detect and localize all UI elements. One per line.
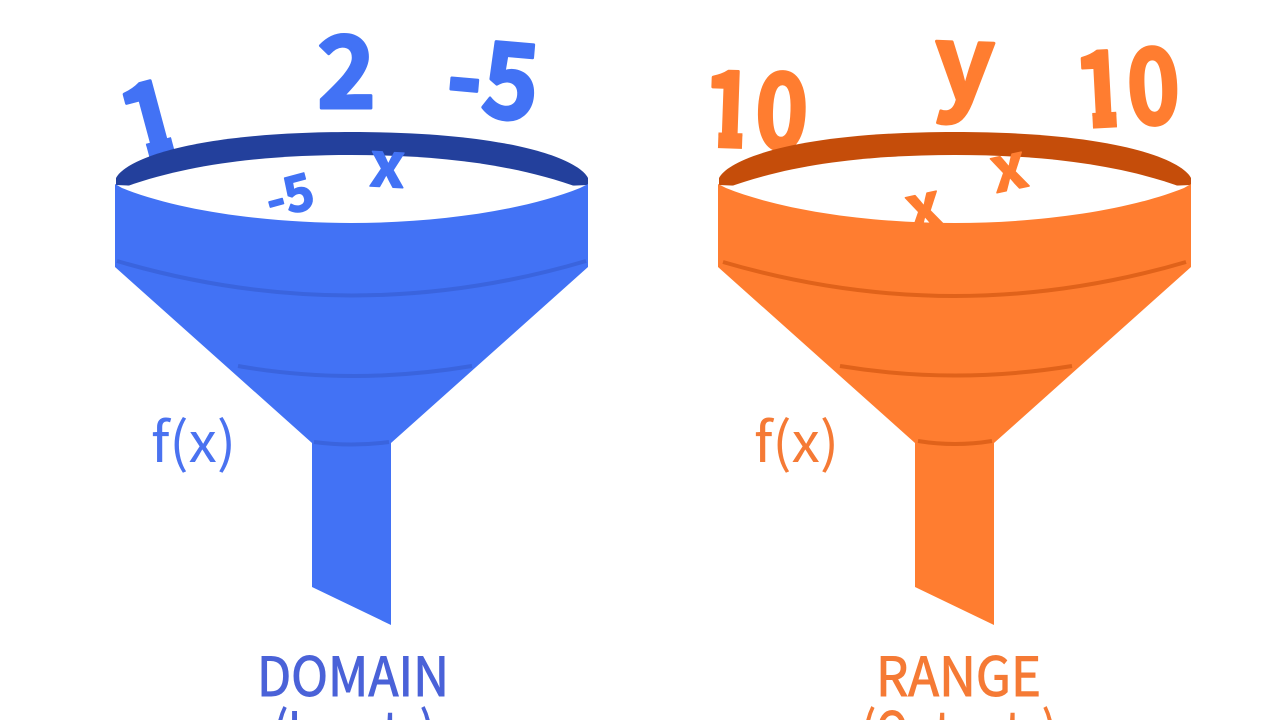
funnel crease middle bbox=[238, 366, 472, 376]
number 10 left: 10 bbox=[700, 25, 811, 181]
number 10 right: 10 bbox=[1070, 2, 1183, 159]
funnel opening bbox=[122, 155, 580, 223]
funnel body bbox=[718, 184, 1191, 625]
funnel crease lower bbox=[314, 442, 389, 444]
funnel crease lower bbox=[918, 441, 992, 444]
funnel crease upper bbox=[723, 262, 1186, 296]
RANGE heading: RANGE bbox=[876, 633, 1041, 712]
funnel crease upper bbox=[117, 261, 586, 296]
panel: domain funnel bbox=[101, 0, 588, 720]
x inside funnel: x bbox=[368, 114, 408, 206]
funnel crease middle bbox=[840, 366, 1072, 376]
number 1 above funnel: 1 bbox=[101, 33, 197, 191]
funnel rim bbox=[116, 132, 588, 195]
small -5 inside funnel: -5 bbox=[256, 152, 321, 233]
funnel opening bbox=[726, 155, 1184, 223]
f(x) label: f(x) bbox=[151, 398, 236, 478]
funnel body bbox=[115, 184, 588, 625]
f(x) label: f(x) bbox=[754, 398, 839, 478]
x inside funnel lower: x bbox=[896, 154, 949, 250]
x inside funnel upper: x bbox=[981, 115, 1034, 211]
funnel rim bbox=[719, 132, 1191, 195]
panel: range funnel bbox=[700, 0, 1191, 720]
DOMAIN heading: DOMAIN bbox=[257, 633, 449, 712]
